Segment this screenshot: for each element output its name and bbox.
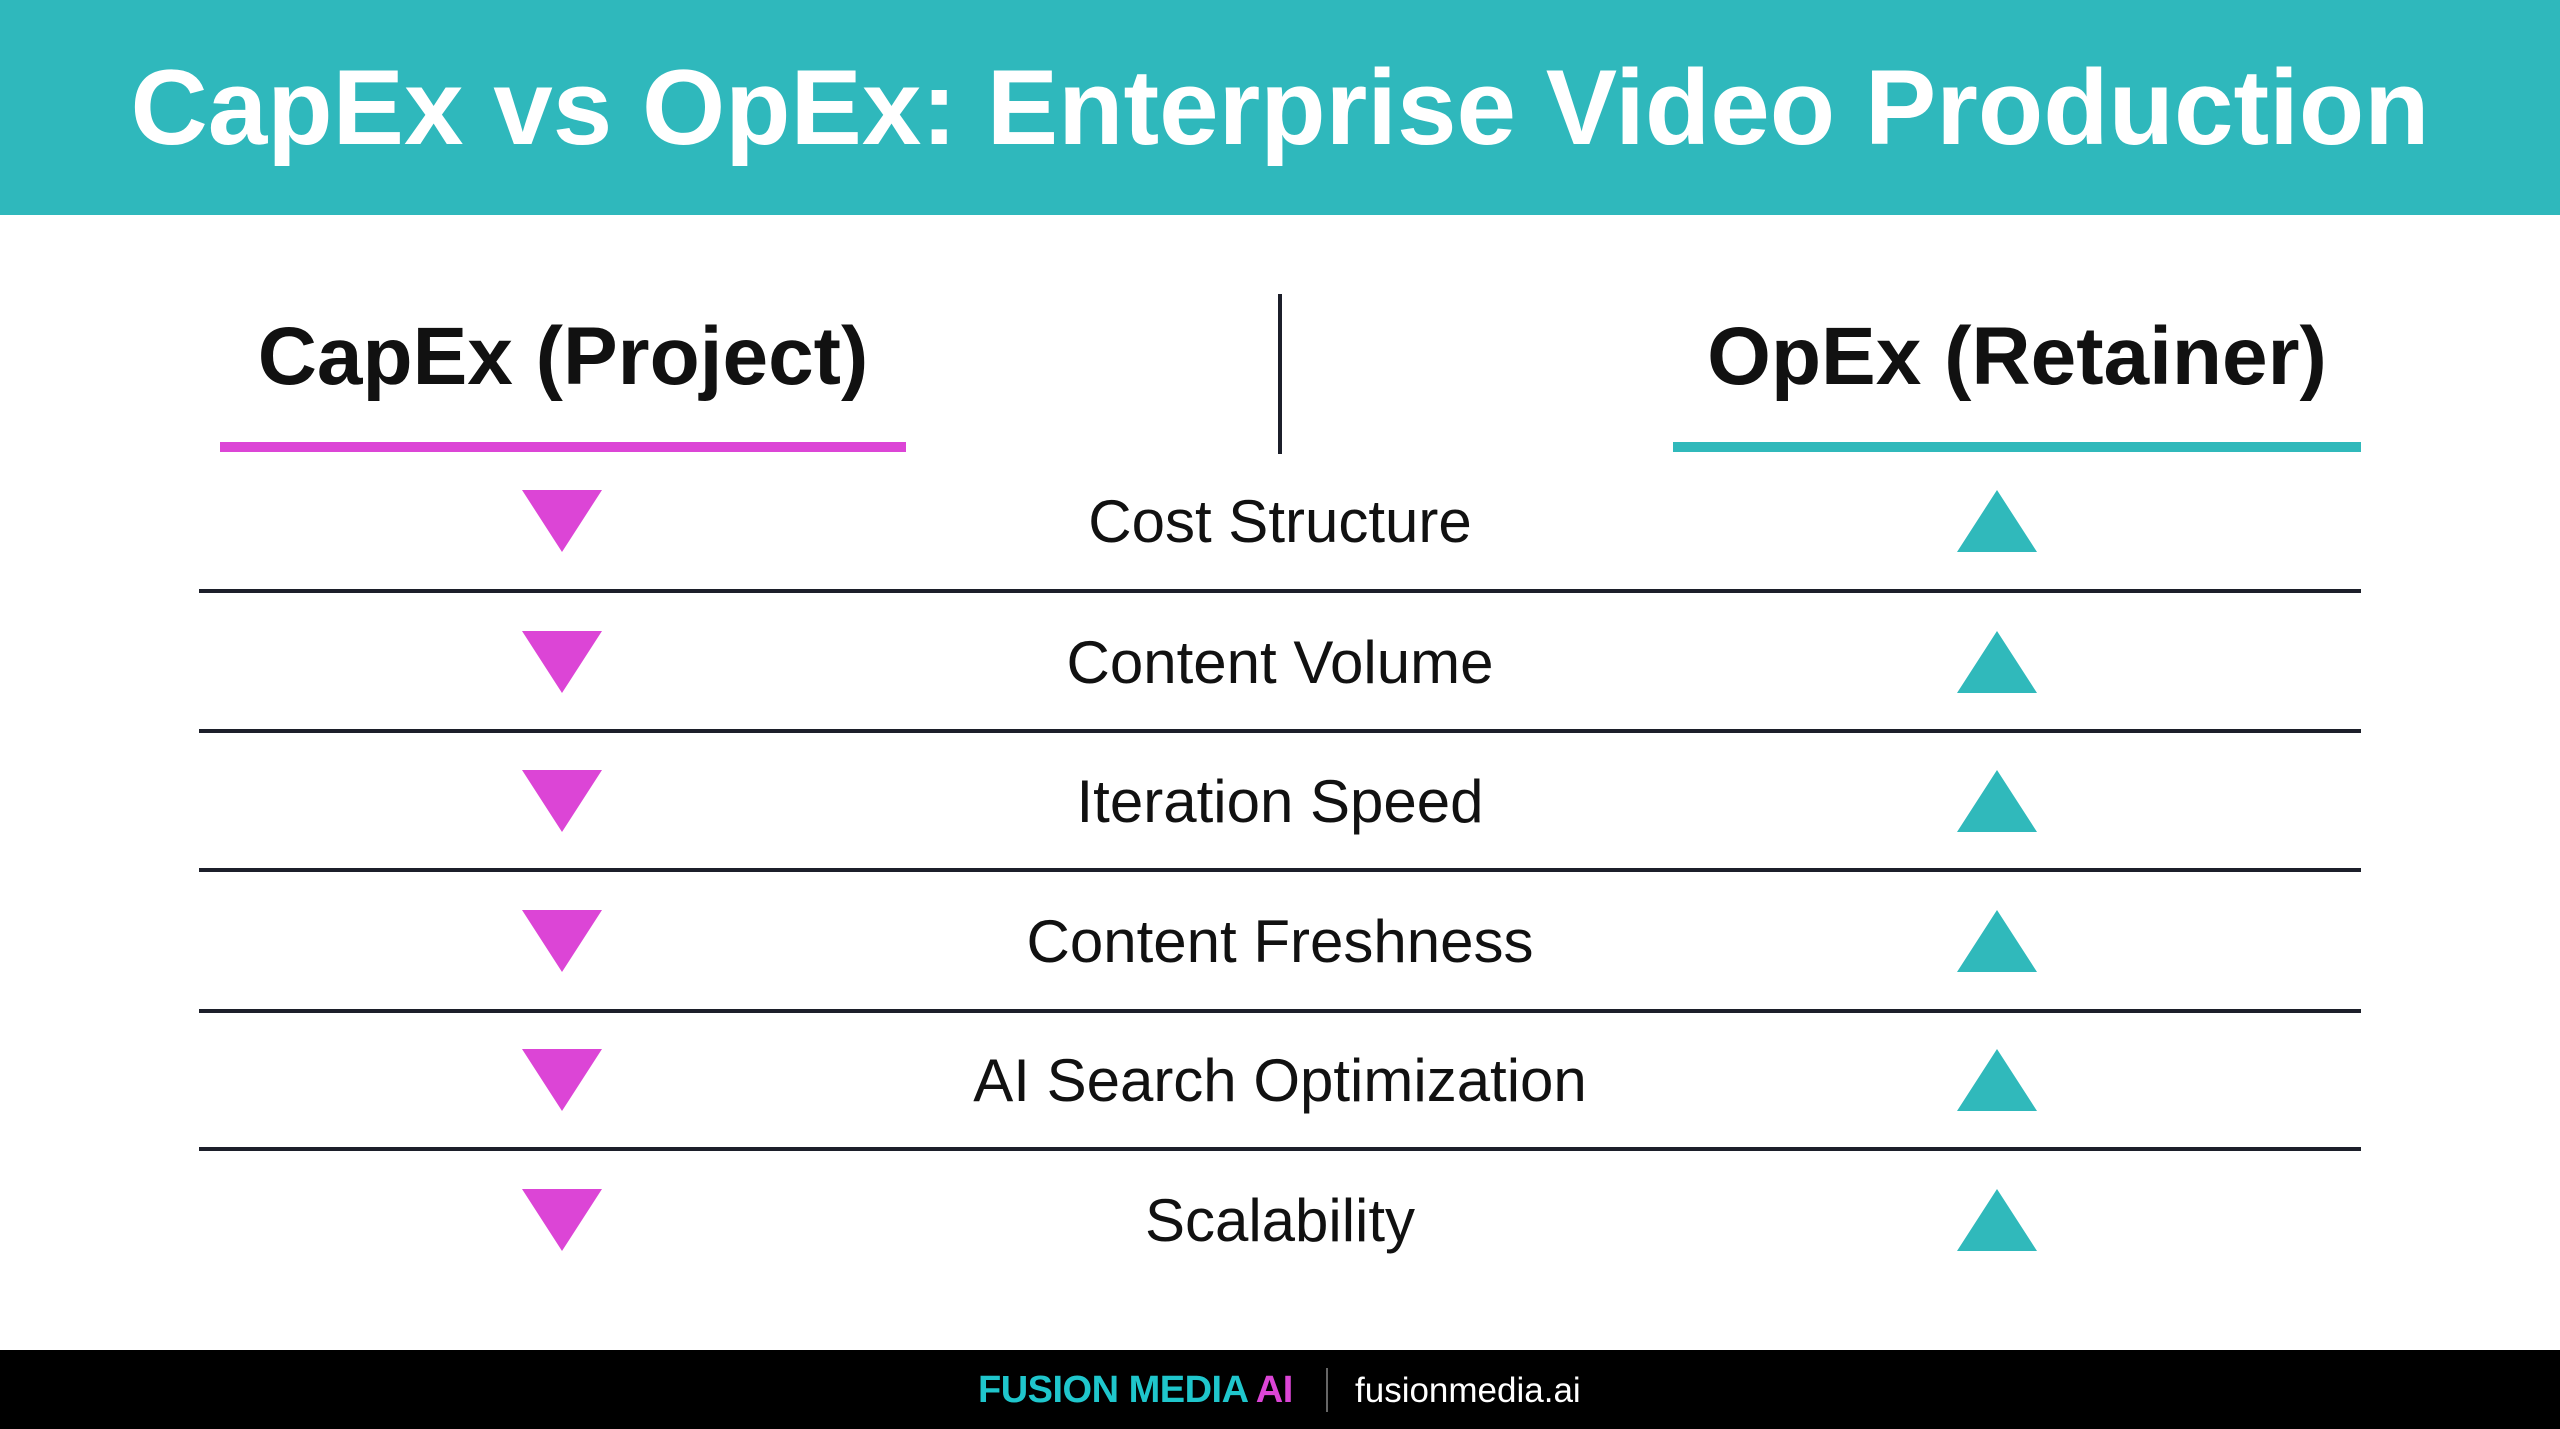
footer brand: FUSION MEDIA AI (978, 1369, 1293, 1411)
row: Content Freshness (522, 908, 2037, 975)
row: AI Search Optimization (522, 1047, 2037, 1114)
underline: OpEx (1673, 442, 2361, 452)
row: Cost Structure: Cost Structure (1088, 488, 1472, 555)
footer (0, 1350, 2560, 1429)
row: Content Volume: Content Volume (1067, 629, 1493, 696)
underline: CapEx (220, 442, 906, 452)
row: Cost Structure (522, 488, 2037, 555)
title: CapEx vs OpEx: Enterprise Video Production (130, 47, 2430, 167)
row: Iteration Speed: Iteration Speed (1077, 768, 1483, 835)
row: Content Volume (522, 629, 2037, 696)
header banner (0, 0, 2560, 215)
row: AI Search Optimization: AI Search Optimization (973, 1047, 1587, 1114)
row: Scalability (522, 1187, 2037, 1254)
row: Iteration Speed (522, 768, 2037, 835)
column heading: CapEx: CapEx (Project) (258, 311, 868, 402)
column heading: OpEx: OpEx (Retainer) (1707, 311, 2327, 402)
footer url: fusionmedia.ai (1355, 1371, 1581, 1410)
row: Content Freshness: Content Freshness (1027, 908, 1533, 975)
row: Scalability: Scalability (1145, 1187, 1415, 1254)
